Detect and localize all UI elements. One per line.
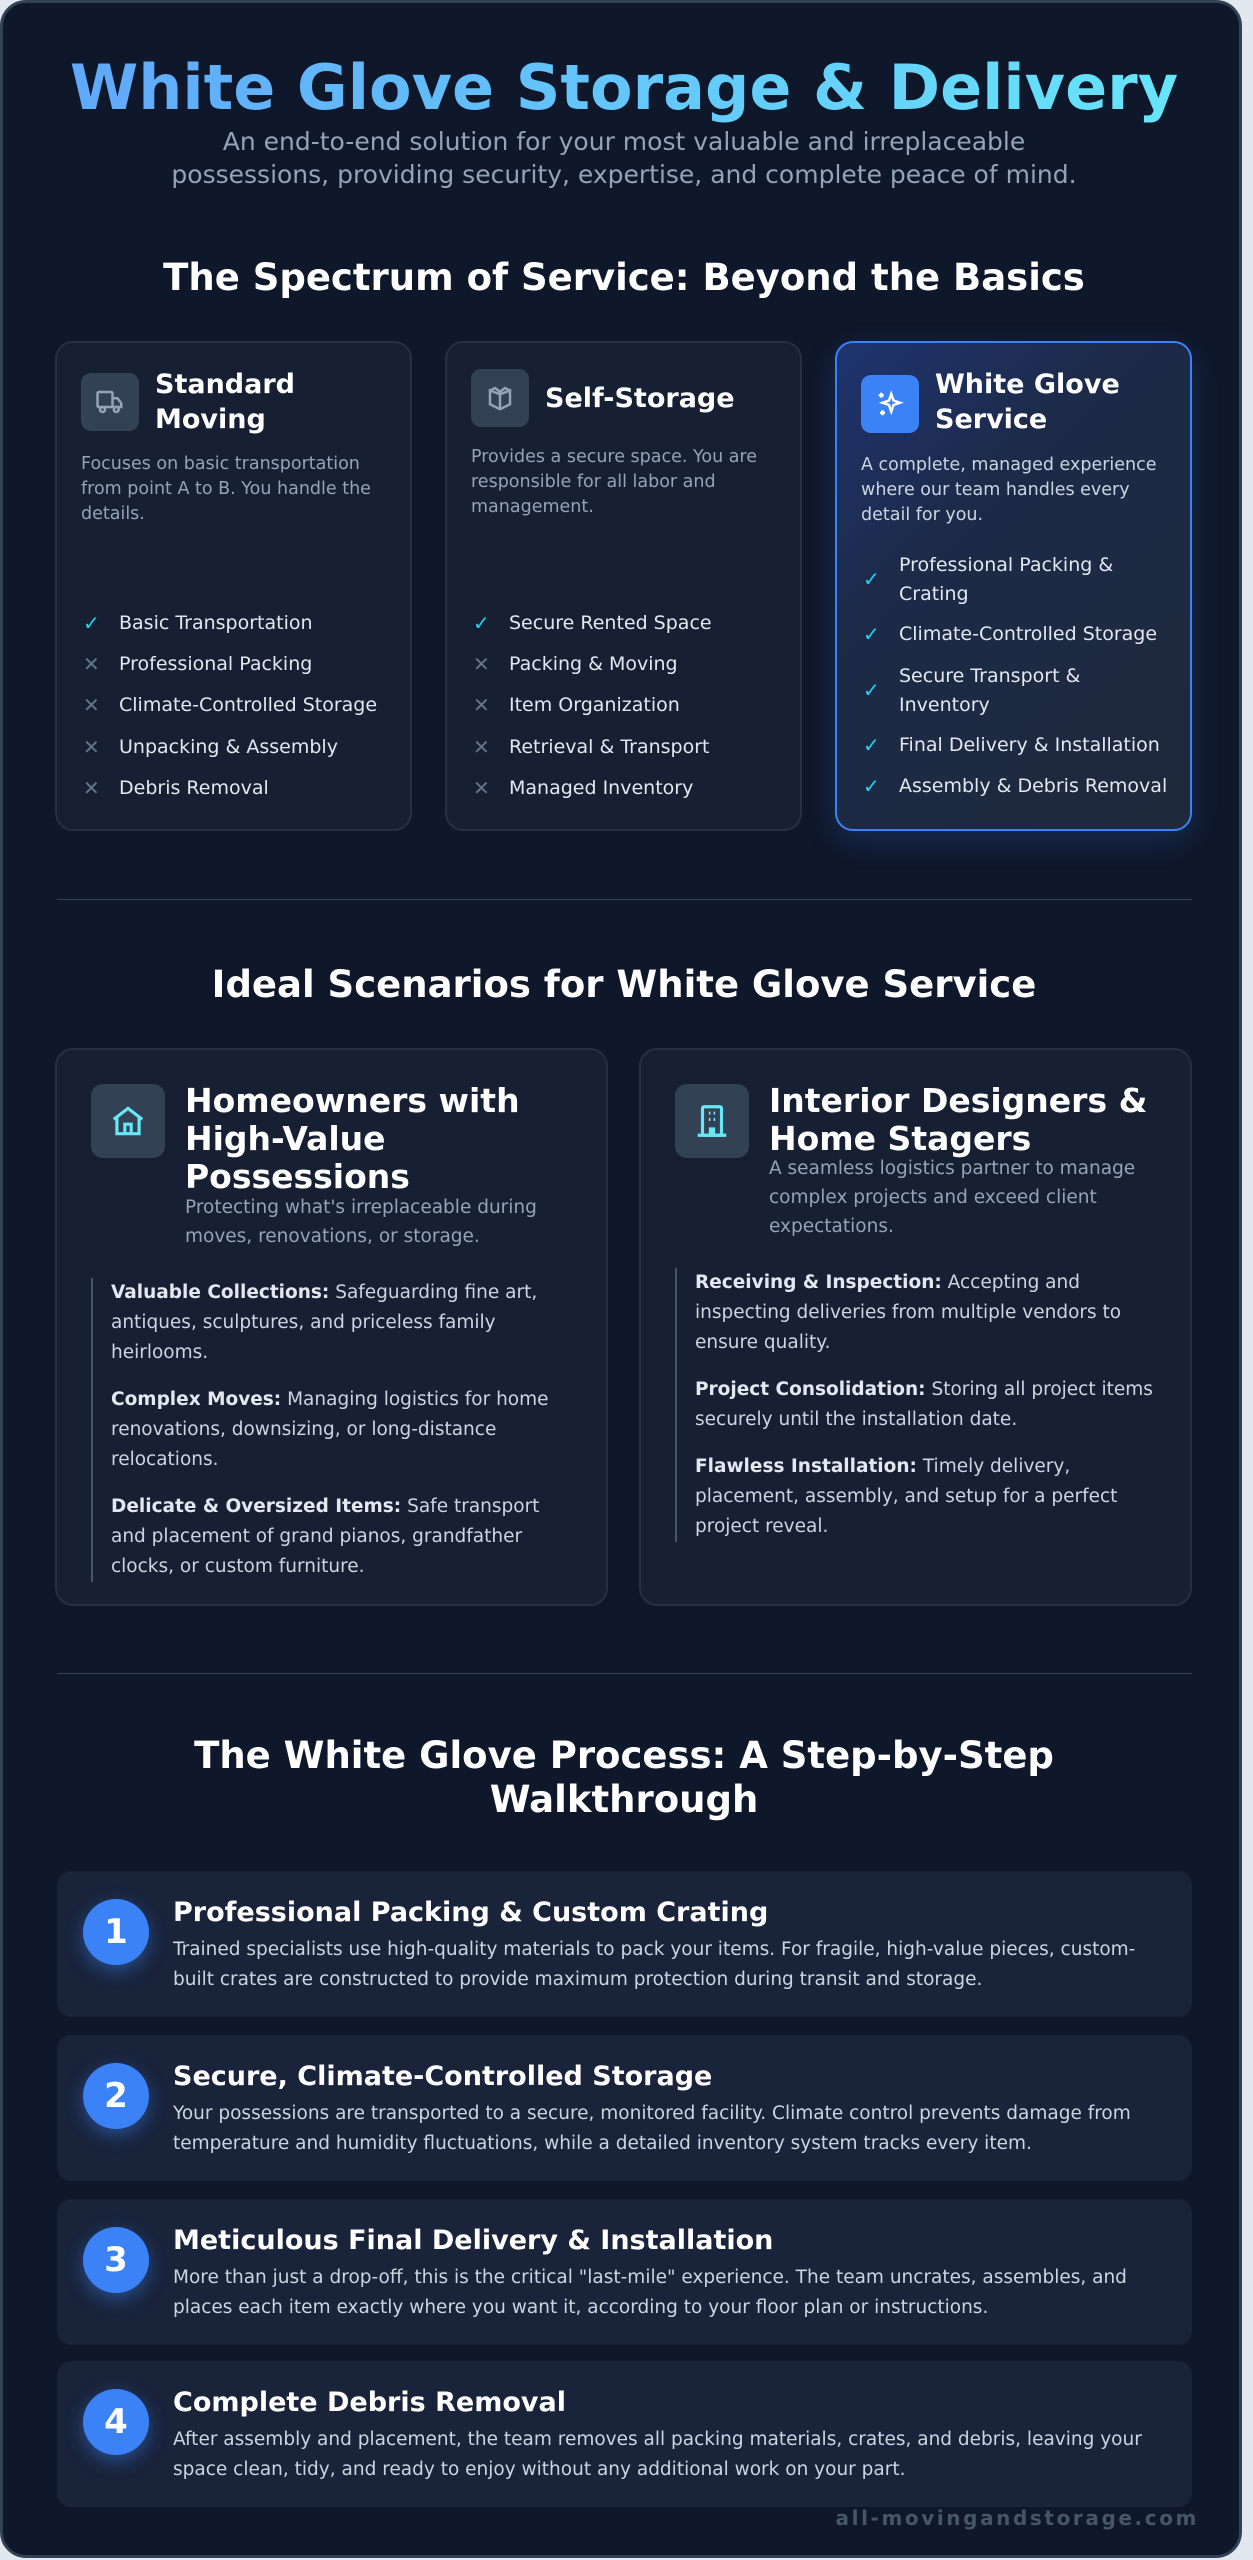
number badge — [83, 2389, 149, 2455]
scenario title — [185, 1081, 520, 1196]
step text: After assembly and placement, the team removes all packing materials, crates, and debris, leaving your space clean, tidy, and ready to enjoy without any additional work on your part. — [173, 2429, 1142, 2480]
feature list: ✕ — [83, 776, 100, 800]
scenario list — [675, 1268, 1160, 1542]
step text: More than just a drop-off, this is the critical "last-mile" experience. The team uncrates, assembles, and places each item exactly where you want it, according to your floor plan or instructions. — [173, 2267, 1127, 2318]
feature list: Secure Rented Space — [509, 612, 712, 634]
feature list: ✓ — [863, 733, 880, 757]
footer: website: all-movingandstorage.com — [836, 2506, 1199, 2530]
feature list — [83, 611, 377, 800]
feature list: Unpacking & Assembly — [119, 736, 338, 758]
feature list — [473, 611, 712, 800]
feature list: Retrieval & Transport — [509, 736, 709, 758]
scenario list: Receiving & Inspection: Accepting and inspecting deliveries from multiple vendors to ensure quality. — [695, 1272, 1121, 1353]
step 4 — [57, 2361, 1192, 2507]
scenario title: Home Stagers — [769, 1119, 1031, 1158]
number badge — [83, 2227, 149, 2293]
feature list: ✕ — [473, 776, 490, 800]
feature list: Assembly & Debris Removal — [899, 775, 1167, 797]
panel: interior designers — [639, 1048, 1192, 1606]
feature list: ✕ — [473, 735, 490, 759]
scenario list: Delicate & Oversized Items: Safe transport and placement of grand pianos, grandfather clocks, or custom furniture. — [111, 1496, 539, 1577]
feature list: ✓ — [863, 678, 880, 702]
feature list: ✕ — [83, 693, 100, 717]
icon: truck — [81, 373, 139, 431]
panel: white glove service — [835, 341, 1192, 831]
feature list: ✓ — [863, 567, 880, 591]
feature list: Debris Removal — [119, 777, 269, 799]
number badge — [83, 2063, 149, 2129]
card title: Self-Storage — [545, 383, 735, 414]
panel: self-storage — [445, 341, 802, 831]
subtitle — [171, 127, 1077, 189]
scenario title: Interior Designers & — [769, 1081, 1147, 1120]
scenario subtitle: Protecting what's irreplaceable during moves, renovations, or storage. — [185, 1197, 537, 1247]
card title — [155, 369, 295, 435]
scenario list: Project Consolidation: Storing all project items securely until the installation date. — [695, 1379, 1153, 1430]
subtitle: possessions, providing security, expertise, and complete peace of mind. — [171, 160, 1077, 189]
card title: White Glove — [935, 369, 1120, 400]
feature list: Professional Packing — [119, 653, 312, 675]
feature list: ✓ — [863, 622, 880, 646]
feature list: Final Delivery & Installation — [899, 734, 1160, 756]
feature list: Climate-Controlled Storage — [899, 623, 1157, 645]
feature list: ✕ — [83, 652, 100, 676]
feature list: Managed Inventory — [509, 777, 693, 799]
heading: spectrum of service: The Spectrum of Service: Beyond the Basics — [163, 256, 1085, 299]
step text: Your possessions are transported to a secure, monitored facility. Climate control prevents damage from temperature and humidity fluctuations, while a detailed inventory system tracks every item. — [173, 2103, 1131, 2154]
description: Provides a secure space. You are responsible for all labor and management. — [471, 447, 757, 517]
card title: Moving — [155, 404, 266, 435]
feature list: ✓ — [473, 611, 490, 635]
number badge: 2 — [104, 2076, 128, 2116]
subtitle: An end-to-end solution for your most valuable and irreplaceable — [223, 127, 1025, 156]
description: A complete, managed experience where our team handles every detail for you. — [861, 455, 1157, 525]
description: Focuses on basic transportation from point A to B. You handle the details. — [81, 454, 371, 524]
step title: Secure, Climate-Controlled Storage — [173, 2061, 712, 2092]
icon: box — [471, 369, 529, 427]
feature list: Packing & Moving — [509, 653, 678, 675]
step title: Meticulous Final Delivery & Installation — [173, 2225, 773, 2256]
feature list: ✓ — [83, 611, 100, 635]
scenario title — [769, 1081, 1147, 1158]
step title: Complete Debris Removal — [173, 2387, 566, 2418]
feature list: Secure Transport & Inventory — [899, 665, 1080, 716]
card title: Standard — [155, 369, 295, 400]
card title: Service — [935, 404, 1047, 435]
number badge: 3 — [104, 2240, 128, 2280]
feature list: ✕ — [473, 652, 490, 676]
scenario title: Possessions — [185, 1157, 410, 1196]
heading: process: The White Glove Process: A Step-by-Step — [194, 1734, 1054, 1777]
step 2 — [57, 2035, 1192, 2181]
icon: sparkle — [861, 375, 919, 433]
feature list: Basic Transportation — [119, 612, 313, 634]
number badge: 1 — [104, 1912, 128, 1952]
step 3 — [57, 2199, 1192, 2345]
heading: ideal scenarios: Ideal Scenarios for White Glove Service — [212, 963, 1036, 1006]
feature list: Climate-Controlled Storage — [119, 694, 377, 716]
step 1 — [57, 1871, 1192, 2017]
panel: homeowners — [55, 1048, 608, 1606]
scenario title: Homeowners with — [185, 1081, 520, 1120]
scenario list — [91, 1278, 576, 1582]
number badge: 4 — [104, 2402, 128, 2442]
feature list — [863, 554, 1167, 798]
scenario subtitle: A seamless logistics partner to manage complex projects and exceed client expectations. — [769, 1158, 1135, 1237]
step text: Trained specialists use high-quality materials to pack your items. For fragile, high-value pieces, custom-built crates are constructed to provide maximum protection during transit and storage. — [173, 1939, 1135, 1990]
scenario title: High-Value — [185, 1119, 386, 1158]
icon: building — [675, 1084, 749, 1158]
feature list: ✕ — [473, 693, 490, 717]
scenario list: Valuable Collections: Safeguarding fine art, antiques, sculptures, and priceless family heirlooms. — [111, 1282, 537, 1363]
panel: standard moving — [55, 341, 412, 831]
feature list: Professional Packing & Crating — [899, 554, 1113, 605]
feature list: ✓ — [863, 774, 880, 798]
icon: house — [91, 1084, 165, 1158]
title: White Glove Storage & Delivery — [70, 51, 1178, 124]
card title — [935, 369, 1120, 435]
heading: process — [194, 1734, 1054, 1821]
number badge — [83, 1899, 149, 1965]
heading: process: Walkthrough — [490, 1778, 758, 1821]
feature list: ✕ — [83, 735, 100, 759]
scenario list: Complex Moves: Managing logistics for home renovations, downsizing, or long-distance relocations. — [111, 1389, 549, 1470]
feature list: Item Organization — [509, 694, 680, 716]
step title: Professional Packing & Custom Crating — [173, 1897, 768, 1928]
scenario list: Flawless Installation: Timely delivery, placement, assembly, and setup for a perfect project reveal. — [695, 1456, 1117, 1537]
